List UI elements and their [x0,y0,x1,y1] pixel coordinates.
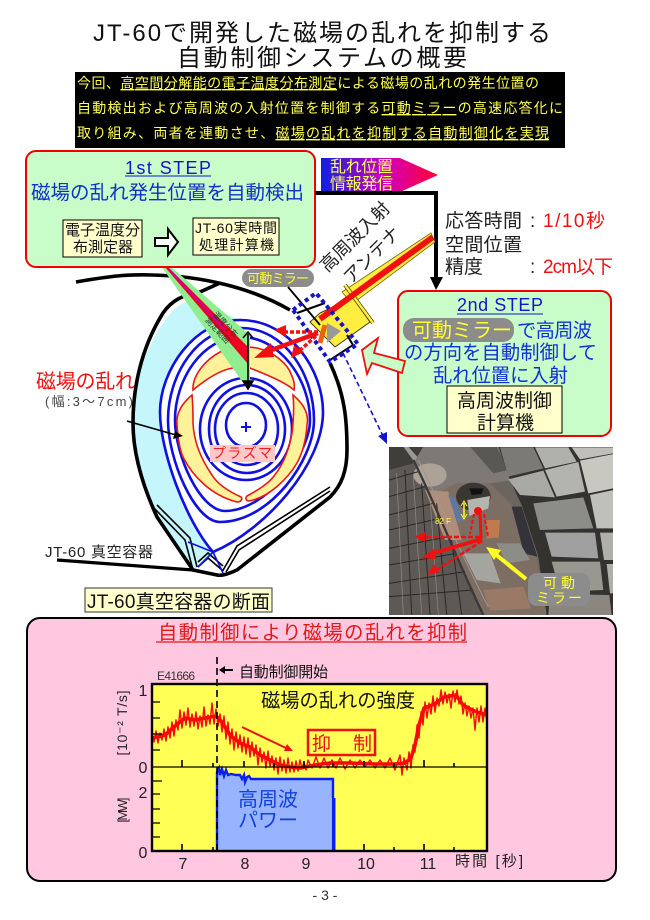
photo: vessel interior [389,447,613,615]
tokamak vessel cross-section [76,275,347,575]
signal banner: 情報発信 [330,175,393,193]
y axis labels [139,683,148,862]
hollow arrow [155,229,178,255]
summary text block [75,72,565,148]
cross-section caption: JT-60真空容器の断面 [87,591,270,613]
y axis labels: 0 [139,760,148,777]
vessel label: JT-60 真空容器 [45,543,153,561]
photo mirror pill: 可動 [543,575,575,591]
magnetic disturbance label: (幅:3〜7cm) [45,394,133,409]
x axis labels: 9 [302,856,311,873]
summary text block: 取り組み、両者を連動させ、磁場の乱れを抑制する自動制御化を実現 [77,125,549,141]
response specs: 2cm以下 [543,257,613,278]
title [93,20,551,72]
plasma centre mark [241,422,251,432]
x axis labels: 10 [357,856,375,873]
box: RF control computer: 高周波制御 [457,390,552,412]
photo mirror pill: ミラー [536,590,582,606]
control start line [216,657,218,851]
rf power area [217,768,336,851]
magnetic surfaces [160,320,323,573]
antenna label: アンテナ [340,223,404,287]
box: electron temperature instrument: 布測定器 [73,239,133,256]
mirror leader line [288,287,320,325]
y axis unit: field: [10⁻² T/s] [114,690,130,756]
y axis labels: 2 [139,785,148,802]
box: RF control computer: 計算機 [477,412,534,434]
response specs: 精度 [445,256,483,278]
chart title: 磁場の乱れの強度 [261,690,415,712]
1st step description: 磁場の乱れ発生位置を自動検出 [31,182,304,204]
control start label: 自動制御開始 [239,664,328,681]
vessel label [45,543,193,570]
signal banner [321,158,438,193]
y axis labels: 0 [139,845,148,862]
title: JT-60で開発した磁場の乱れを抑制する [93,20,551,47]
2nd step description: 乱れ位置に入射 [433,365,568,387]
page number: - 3 - [313,887,338,903]
x axis labels [179,856,436,873]
response specs: : [530,211,535,232]
magnetic disturbance label [36,370,183,439]
measurement beam: 測定範囲 [203,315,232,345]
box: realtime computer: 処理計算機 [199,237,274,253]
divertor plates [153,487,330,572]
response specs [445,210,613,278]
summary text block: 今回、高空間分解能の電子温度分布測定による磁場の乱れの発生位置の [77,75,539,91]
1st step heading: 1st STEP [125,158,211,178]
response specs: : [530,257,535,278]
measurement beam [147,246,250,383]
rf beam arrows [254,325,318,358]
response specs: 空間位置 [445,234,522,256]
disturbance trace [152,690,487,775]
box: electron temperature instrument: 電子温度分 [65,222,140,239]
chart: disturbance and power [152,657,487,851]
x axis labels: 7 [179,856,188,873]
box: realtime computer: JT-60実時間 [195,220,277,236]
measurement range double arrow [243,332,253,389]
antenna [297,233,435,360]
suppression tag [308,730,375,755]
box: electron temperature instrument [63,220,142,257]
box: RF control computer [447,386,562,434]
signal banner: 乱れ位置 [330,158,393,176]
magnetic islands [177,347,307,502]
2nd step description: の方向を自動制御して [404,342,597,364]
rf power label: 高周波 [238,788,298,811]
2nd step description: で高周波 [517,320,592,342]
2nd step description [404,320,597,387]
movable mirror pill: 可動ミラー [247,271,309,286]
shot number: E41666 [157,669,195,683]
antenna label: 高周波入射 [316,198,394,276]
hollow red arrow [362,338,405,374]
measurement beam: 温度分布 [211,309,240,339]
y axis unit: power: [MW] [115,798,130,822]
title: 自動制御システムの概要 [177,45,467,72]
x axis labels: 11 [420,856,436,873]
panel: suppression result [27,618,616,881]
panel: 1st step [26,151,315,267]
scrape-off region [134,303,240,570]
response specs: 1/10秒 [543,210,605,232]
suppression tag: 抑 [312,733,331,755]
2nd step heading: 2nd STEP [457,295,543,315]
magnetic disturbance label: 磁場の乱れ [36,370,135,393]
photo annotations: 82 F [435,517,451,526]
mirror zoom box [293,293,358,362]
suppression heading: 自動制御により磁場の乱れを抑制 [158,622,467,644]
suppression tag: 制 [353,733,372,755]
panel: 2nd step [398,291,611,436]
plasma label: プラズマ [212,445,272,461]
x axis title: 時間 [秒] [455,853,523,870]
chart: disturbance and power: パワー [238,810,298,832]
y axis labels: 1 [139,683,148,700]
suppression trend arrow [242,727,293,751]
box: realtime computer [193,218,279,255]
photo mirror pill [528,573,590,606]
vessel wall [76,275,347,575]
x axis labels: 8 [241,856,250,873]
signal arrow [315,193,443,290]
mirror pill in text: 可動ミラー [412,319,512,342]
photo annotations [414,501,526,579]
response specs: 応答時間 [445,210,522,232]
axes and ticks [152,684,487,851]
photo link arrow [343,353,387,444]
summary text block: 自動検出および高周波の入射位置を制御する可動ミラーの高速応答化に [77,100,563,116]
